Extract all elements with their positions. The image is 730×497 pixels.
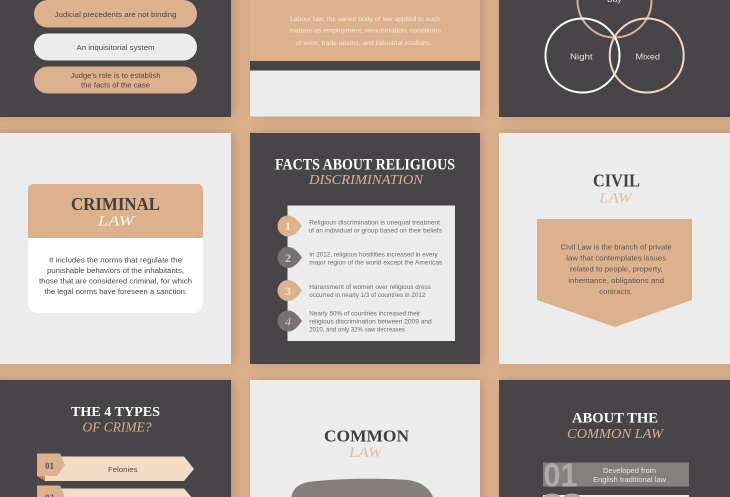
ribbon: felonies — [37, 454, 194, 481]
heading — [71, 194, 160, 230]
pill: judge's role — [34, 66, 197, 94]
circle: night — [546, 18, 620, 92]
fact 1 — [278, 216, 443, 236]
fact 1: 1 — [285, 219, 291, 233]
item 01: English traditional law — [593, 475, 667, 484]
body text: those that are considered criminal, for which — [39, 276, 192, 286]
fact 1: Religious discrimination is unequal treatment — [309, 219, 440, 226]
tan text block: Labour law, the varied body of law applied to such — [290, 16, 440, 23]
heading: OF CRIME? — [82, 420, 152, 435]
body text — [39, 256, 192, 296]
heading: DISCRIMINATION — [308, 172, 424, 187]
tan text block: of work, trade unions, and industrial relations. — [296, 40, 432, 47]
pentagon callout: inheritance, obligations and — [568, 276, 664, 285]
pill: inquisitorial system — [34, 34, 197, 60]
heading: ABOUT THE — [572, 411, 658, 427]
panel: facts about religious discrimination — [250, 133, 480, 364]
fact 4: 4 — [285, 314, 291, 328]
fact 3: 3 — [285, 284, 291, 298]
panel: common law — [250, 380, 480, 497]
facts card — [288, 206, 455, 341]
fact 4 — [278, 310, 432, 334]
body text: It includes the norms that regulate the — [49, 256, 182, 264]
circle: day — [578, 0, 652, 38]
item 02 — [543, 494, 689, 497]
heading — [275, 156, 455, 187]
pentagon callout: contracts. — [599, 287, 633, 296]
dark band — [250, 61, 480, 70]
fact 3: Harassment of women over religious dress — [309, 284, 432, 291]
pill: judicial precedents: Judicial precedents are not binding — [54, 10, 176, 19]
ribbon: second item — [37, 486, 194, 497]
fact 2 — [278, 247, 443, 268]
panel: criminal law — [0, 133, 231, 364]
pill: judicial precedents — [34, 0, 197, 28]
pill: judge's role: the facts of the case — [81, 80, 150, 89]
fact 2: major region of the world except the Americas — [309, 260, 443, 267]
panel: the 4 types of crime — [0, 380, 231, 497]
panel: about the common law — [499, 380, 730, 497]
pentagon callout: law that contemplates issues — [566, 254, 666, 263]
panel: civil law — [499, 133, 730, 364]
ribbon: felonies: 01 — [45, 462, 54, 472]
fact 4: 2010, and only 32% saw decreases — [309, 327, 406, 334]
heading — [324, 427, 410, 461]
fact 2: In 2012, religious hostilities increased in every — [309, 252, 438, 259]
pentagon callout — [537, 219, 692, 327]
pill: inquisitorial system: An inquisitorial system — [76, 43, 154, 52]
tan text block — [250, 0, 480, 61]
item 01 — [543, 456, 689, 494]
heading — [593, 171, 640, 207]
panel: inquisitorial system list — [0, 0, 231, 117]
heading: FACTS ABOUT RELIGIOUS — [275, 156, 455, 174]
heading: COMMON — [324, 427, 410, 446]
item 01: 01 — [544, 456, 578, 494]
circle: night: Night — [570, 51, 593, 61]
fact 2: 2 — [285, 251, 291, 265]
circle: mixed: Mixed — [636, 51, 660, 61]
fact 3 — [278, 280, 432, 301]
heading: THE 4 TYPES — [71, 405, 160, 420]
circle: mixed — [610, 18, 684, 92]
pill: judge's role: Judge's role is to establish — [70, 71, 160, 80]
fact 1: of an individual or group based on their beliefs — [308, 228, 443, 235]
pentagon callout: Civil Law is the branch of private — [561, 242, 672, 252]
panel: shift venn diagram — [499, 0, 730, 117]
gray blob — [291, 479, 434, 497]
item 01: Developed from — [603, 466, 656, 475]
fact 3: occurred in nearly 1/3 of countries in 2012 — [309, 292, 425, 299]
fact 4: religious discrimination between 2009 and — [309, 319, 432, 326]
card — [28, 184, 203, 313]
ribbon: felonies: Felonies — [108, 465, 138, 474]
heading: CIVIL — [593, 171, 640, 191]
heading — [567, 411, 664, 442]
heading — [71, 405, 160, 435]
pentagon callout: related to people, property, — [570, 265, 663, 274]
body text: the legal norms have foreseen a sanction. — [44, 287, 187, 296]
heading: LAW — [598, 191, 634, 207]
fact 4: Nearly 50% of countries increased their — [309, 311, 421, 318]
heading: COMMON LAW — [567, 427, 664, 442]
tan text block: matters as employment, remuneration, conditions — [289, 28, 442, 34]
heading: LAW — [348, 445, 384, 461]
heading: LAW — [97, 214, 136, 230]
heading: CRIMINAL — [71, 194, 160, 214]
panel: labour law — [250, 0, 480, 116]
body text: punishable behaviors of the inhabitants, — [47, 266, 184, 275]
